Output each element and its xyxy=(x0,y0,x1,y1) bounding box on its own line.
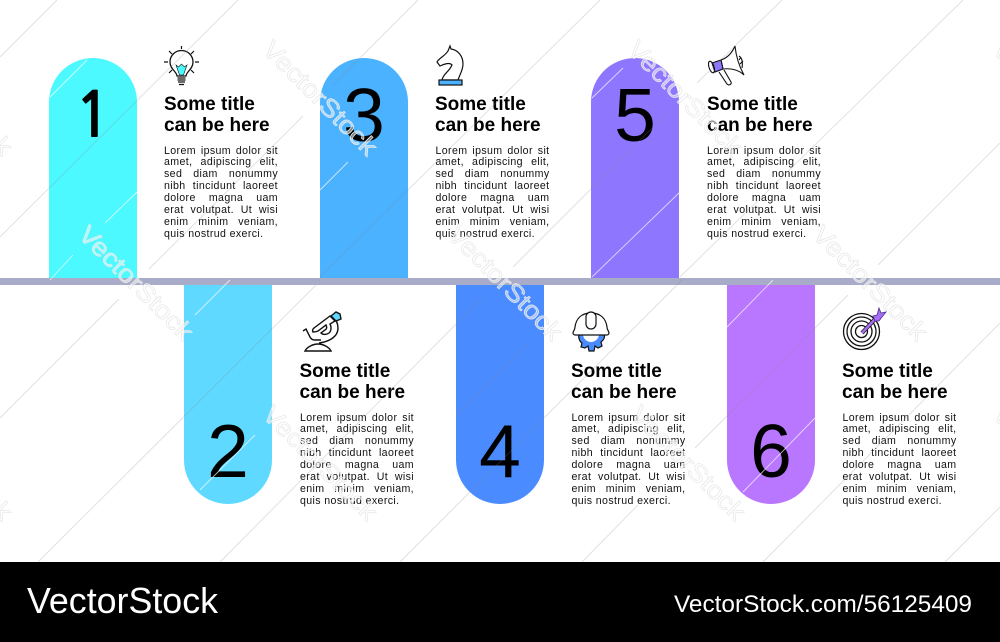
text: step 6: nibh tincidunt laoreet xyxy=(842,447,956,459)
title: step 2: can be here xyxy=(300,382,405,403)
text: step 3: dolore magna uam xyxy=(436,192,550,204)
title: step 2: Some title xyxy=(300,360,390,382)
central horizontal bar xyxy=(0,278,1000,285)
text: step 3: sed diam nonummy xyxy=(436,168,550,180)
text: step 5: sed diam nonummy xyxy=(707,168,821,180)
text: step 2: amet, adipiscing elit, xyxy=(300,423,414,435)
text: step 2: erat volutpat. Ut wisi xyxy=(300,471,414,483)
text: step 1: quis nostrud exerci. xyxy=(164,228,263,240)
text: step 6: Lorem ipsum dolor sit xyxy=(842,412,956,424)
title: step 1: can be here xyxy=(164,115,270,136)
text: step 1: sed diam nonummy xyxy=(164,168,278,180)
title: step 3 xyxy=(435,94,541,136)
title: step 5: Some title xyxy=(707,94,798,114)
icon: megaphone xyxy=(708,46,744,86)
watermark overlay: VectorStock xyxy=(257,35,383,162)
text: step 6: dolore magna uam xyxy=(842,459,956,471)
text: step 3: quis nostrud exerci. xyxy=(436,228,535,240)
panel: step 2 pill xyxy=(184,285,272,504)
title: step 3: can be here xyxy=(435,115,541,136)
watermark overlay: VectorStock xyxy=(257,400,383,527)
text: step 2: quis nostrud exerci. xyxy=(300,495,399,507)
text: step 5: quis nostrud exerci. xyxy=(707,228,806,240)
title: step 6: Some title xyxy=(842,360,933,382)
icon: light bulb xyxy=(164,46,199,86)
number 5: 5 xyxy=(614,72,656,156)
text: step 3 xyxy=(436,144,550,240)
text: step 5: nibh tincidunt laoreet xyxy=(707,180,821,192)
text: step 2: nibh tincidunt laoreet xyxy=(300,447,414,459)
text: step 4: Lorem ipsum dolor sit xyxy=(572,412,686,424)
text: step 5: Lorem ipsum dolor sit xyxy=(707,144,821,156)
panel: step 3 pill xyxy=(320,58,408,278)
text: step 5 xyxy=(707,144,821,240)
text: step 4: erat volutpat. Ut wisi xyxy=(572,471,686,483)
title: step 6: can be here xyxy=(842,382,948,403)
panel: step 6 pill xyxy=(727,285,815,504)
title: step 6 xyxy=(842,360,948,403)
footer band xyxy=(0,562,1000,642)
watermark overlay: VectorStock xyxy=(442,220,568,347)
text: step 3: amet, adipiscing elit, xyxy=(436,156,550,168)
watermark overlay: VectorStock xyxy=(807,220,933,347)
title: step 4: Some title xyxy=(571,360,662,382)
text: step 6: erat volutpat. Ut wisi xyxy=(842,471,956,483)
panel: step 4 pill xyxy=(456,285,544,504)
text: step 1 xyxy=(164,144,278,240)
text: step 4: quis nostrud exerci. xyxy=(572,495,671,507)
title: step 1: Some title xyxy=(164,94,255,114)
text: step 3: enim minim veniam, xyxy=(436,216,550,228)
text: step 2 xyxy=(300,412,414,507)
number 6: 6 xyxy=(750,408,792,492)
number 4: 4 xyxy=(479,408,521,492)
text: step 1: dolore magna uam xyxy=(164,192,278,204)
title: step 1 xyxy=(164,94,270,136)
text: step 1: erat volutpat. Ut wisi xyxy=(164,204,278,216)
text: step 5: amet, adipiscing elit, xyxy=(707,156,821,168)
text: step 6: amet, adipiscing elit, xyxy=(842,423,956,435)
text: step 3: erat volutpat. Ut wisi xyxy=(436,204,550,216)
number 1: 1 xyxy=(74,86,112,146)
text: step 4: amet, adipiscing elit, xyxy=(572,423,686,435)
text: step 3: nibh tincidunt laoreet xyxy=(436,180,550,192)
icon: target with arrow xyxy=(842,306,887,350)
panel: step 5 pill xyxy=(591,58,679,278)
icon: helmet and gear xyxy=(572,311,610,352)
watermark overlay: VectorStock xyxy=(73,220,199,347)
text: step 3: Lorem ipsum dolor sit xyxy=(436,144,550,156)
title: step 4: can be here xyxy=(571,382,677,403)
text: step 5: erat volutpat. Ut wisi xyxy=(707,204,821,216)
title: step 3: Some title xyxy=(435,94,526,114)
watermark overlay: VectorStock xyxy=(625,400,751,527)
text: step 1: enim minim veniam, xyxy=(164,216,278,228)
footer logo text: VectorStock xyxy=(27,580,219,621)
text: step 1: Lorem ipsum dolor sit xyxy=(164,144,278,156)
title: step 2 xyxy=(300,360,405,403)
footer image id: VectorStock.com/56125409 xyxy=(674,591,972,618)
text: step 5: dolore magna uam xyxy=(707,192,821,204)
title: step 4 xyxy=(571,360,677,403)
number 3: 3 xyxy=(343,72,385,156)
panel: step 1 pill xyxy=(49,58,137,278)
text: step 6 xyxy=(842,412,956,507)
text: step 6: quis nostrud exerci. xyxy=(842,495,942,507)
watermark overlay: VectorStock xyxy=(622,35,748,162)
text: step 2: dolore magna uam xyxy=(300,459,414,471)
text: step 4: enim minim veniam, xyxy=(572,483,686,495)
number 2: 2 xyxy=(207,408,249,492)
icon: microscope xyxy=(302,311,342,352)
text: step 4: dolore magna uam xyxy=(572,459,686,471)
text: step 2: Lorem ipsum dolor sit xyxy=(300,412,414,424)
text: step 6: sed diam nonummy xyxy=(842,435,956,447)
text: step 4: nibh tincidunt laoreet xyxy=(572,447,686,459)
text: step 4: sed diam nonummy xyxy=(572,435,686,447)
text: step 1: nibh tincidunt laoreet xyxy=(164,180,278,192)
text: step 5: enim minim veniam, xyxy=(707,216,821,228)
text: step 4 xyxy=(572,412,686,507)
text: step 2: sed diam nonummy xyxy=(300,435,414,447)
icon: chess knight xyxy=(436,44,464,86)
title: step 5: can be here xyxy=(707,115,813,136)
text: step 1: amet, adipiscing elit, xyxy=(164,156,278,168)
title: step 5 xyxy=(707,94,813,136)
text: step 2: enim minim veniam, xyxy=(300,483,414,495)
text: step 6: enim minim veniam, xyxy=(842,483,956,495)
